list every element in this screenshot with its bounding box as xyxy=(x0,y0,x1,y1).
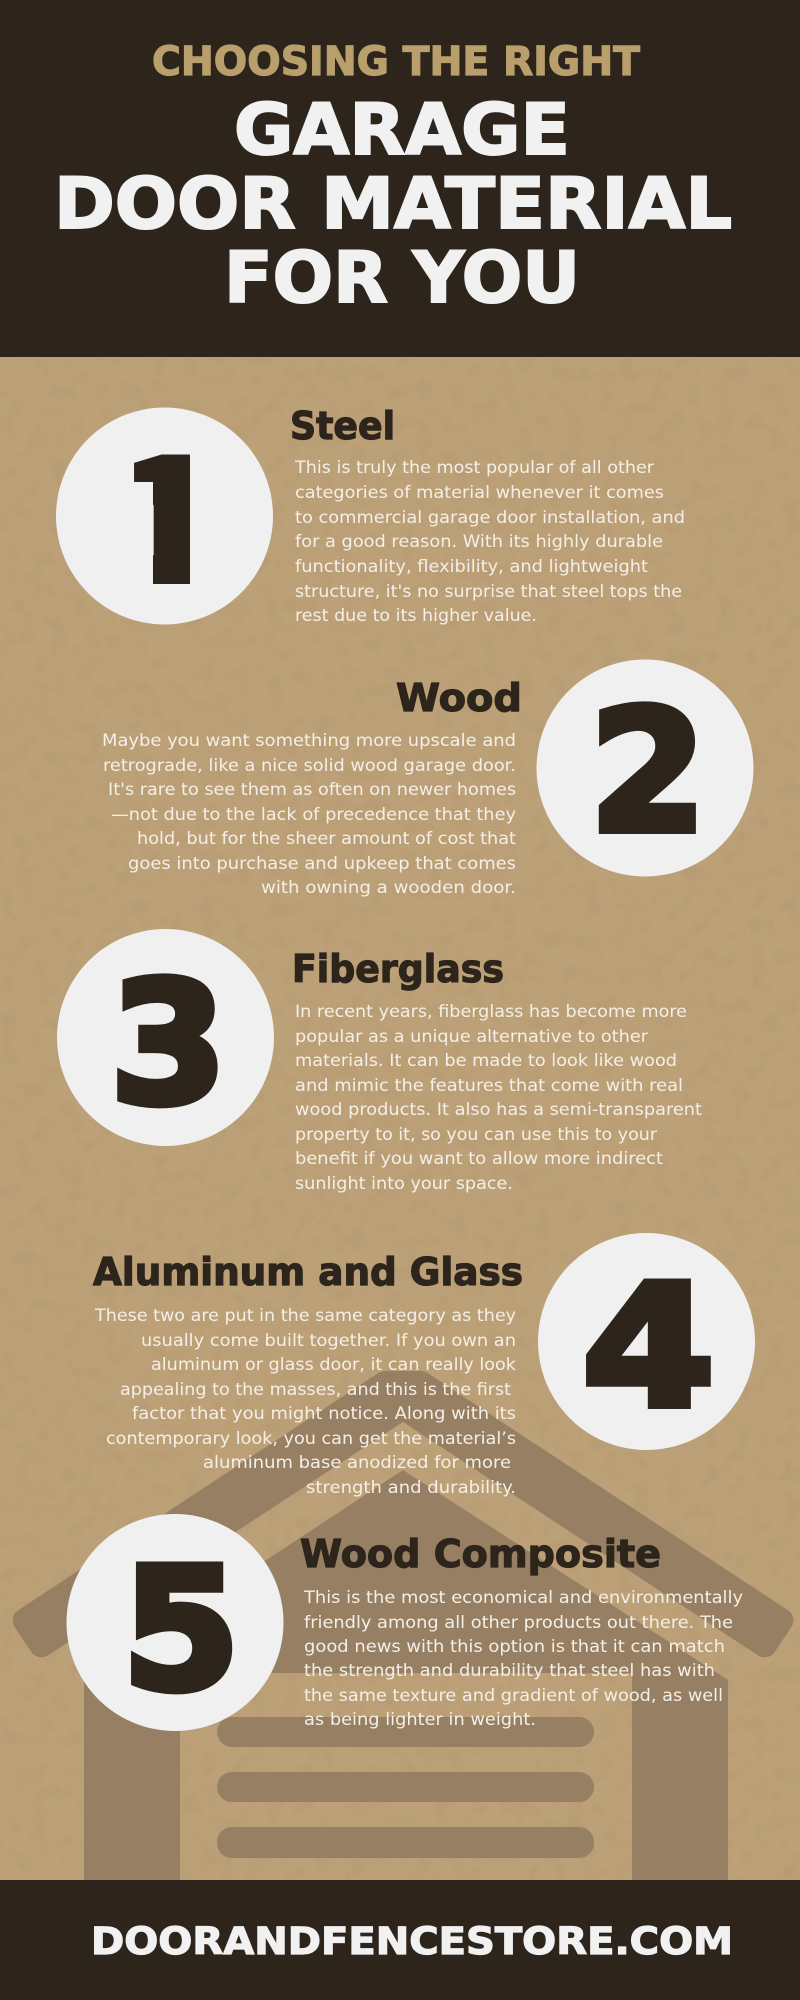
text block: fiberglass: popular as a unique alternative to other xyxy=(295,1027,648,1046)
heading: steel: Steel xyxy=(290,404,395,448)
text block: fiberglass: property to it, so you can use this to your xyxy=(295,1125,657,1144)
heading: aluminum and glass: Aluminum and Glass xyxy=(93,1250,523,1294)
text block: steel: to commercial garage door installation, and xyxy=(295,508,685,527)
text block: wood composite: the same texture and gradient of wood, as well xyxy=(304,1686,723,1705)
text block: steel xyxy=(294,458,685,625)
text block: fiberglass: benefit if you want to allow more indirect xyxy=(295,1149,664,1168)
icon: number 1 badge xyxy=(56,408,273,630)
text block: steel: This is truly the most popular of all other xyxy=(294,458,654,477)
icon: number 2 badge: 2 xyxy=(590,674,706,870)
text block: aluminum and glass xyxy=(94,1306,516,1497)
panel: 3 fiberglass xyxy=(57,929,703,1193)
panel: footer xyxy=(0,1880,800,2000)
panel: 4 aluminum and glass xyxy=(93,1233,755,1497)
text block: wood composite: good news with this option is that it can match xyxy=(304,1637,725,1656)
text block: fiberglass xyxy=(295,1002,703,1193)
text block: steel: for a good reason. With its highly durable xyxy=(295,532,663,551)
text block: wood: —not due to the lack of precedence that they xyxy=(111,805,516,824)
text block: wood composite: This is the most economical and environmentally xyxy=(303,1588,743,1607)
title: main heading xyxy=(54,89,732,319)
text block: aluminum and glass: factor that you might notice. Along with its xyxy=(132,1404,516,1423)
panel: 2 wood xyxy=(102,660,754,897)
icon: number 4 badge xyxy=(538,1233,755,1450)
icon: number 3 badge xyxy=(57,929,274,1146)
text block: fiberglass: In recent years, fiberglass has become more xyxy=(295,1002,687,1021)
title: eyebrow: CHOOSING THE RIGHT xyxy=(152,39,641,85)
text block: wood: retrograde, like a nice solid wood garage door. xyxy=(103,756,516,775)
text block: aluminum and glass: appealing to the masses, and this is the first xyxy=(120,1380,512,1399)
heading: fiberglass: Fiberglass xyxy=(292,947,504,991)
text block: steel: rest due to its higher value. xyxy=(295,606,537,625)
text block: aluminum and glass: These two are put in the same category as they xyxy=(94,1306,516,1325)
icon: number 4 badge: 4 xyxy=(582,1249,715,1445)
text block: wood composite: the strength and durability that steel has with xyxy=(304,1661,715,1680)
title: main heading: FOR YOU xyxy=(224,237,580,319)
text block: wood xyxy=(102,731,517,897)
text block: wood: It's rare to see them as often on newer homes xyxy=(108,780,516,799)
text block: aluminum and glass: strength and durability. xyxy=(306,1478,516,1497)
text block: fiberglass: wood products. It also has a semi-transparent xyxy=(295,1100,703,1119)
text block: aluminum and glass: contemporary look, you can get the material’s xyxy=(106,1429,516,1448)
text block: wood: hold, but for the sheer amount of cost that xyxy=(137,829,517,848)
text block: fiberglass: materials. It can be made to look like wood xyxy=(295,1051,677,1070)
icon: number 5 badge xyxy=(66,1514,284,1731)
icon: garage silhouette xyxy=(25,1383,781,1880)
text block: wood: with owning a wooden door. xyxy=(261,878,516,897)
icon: number 3 badge: 3 xyxy=(110,946,227,1142)
text block: wood composite xyxy=(303,1588,743,1729)
text block: fiberglass: sunlight into your space. xyxy=(295,1174,513,1193)
text block: wood composite: as being lighter in weight. xyxy=(304,1710,536,1729)
text block: wood: Maybe you want something more upscale and xyxy=(102,731,516,750)
icon: number 5 badge: 5 xyxy=(122,1532,240,1728)
text block: steel: categories of material whenever it comes xyxy=(295,483,664,502)
heading: wood: Wood xyxy=(396,676,522,720)
text: website: DOORANDFENCESTORE.COM xyxy=(91,1920,733,1963)
icon: number 1 badge: 1 xyxy=(130,434,210,630)
text block: aluminum and glass: aluminum or glass door, it can really look xyxy=(151,1355,516,1374)
panel: 5 wood composite xyxy=(66,1514,743,1731)
text block: aluminum and glass: usually come built together. If you own an xyxy=(141,1331,516,1350)
text block: wood: goes into purchase and upkeep that comes xyxy=(128,854,516,873)
title: main heading: GARAGE xyxy=(234,89,570,171)
panel: tan textured background xyxy=(0,357,800,1880)
text block: wood composite: friendly among all other products out there. The xyxy=(304,1613,733,1632)
icon: number 2 badge xyxy=(536,660,754,876)
title: main heading: DOOR MATERIAL xyxy=(54,163,732,245)
text block: steel: structure, it's no surprise that steel tops the xyxy=(295,582,682,601)
heading: wood composite: Wood Composite xyxy=(300,1532,661,1576)
panel: 1 steel xyxy=(56,404,685,630)
text block: fiberglass: and mimic the features that come with real xyxy=(295,1076,683,1095)
text block: steel: functionality, flexibility, and lightweight xyxy=(295,557,649,576)
panel: header xyxy=(0,0,800,357)
text block: aluminum and glass: aluminum base anodized for more xyxy=(203,1453,511,1472)
